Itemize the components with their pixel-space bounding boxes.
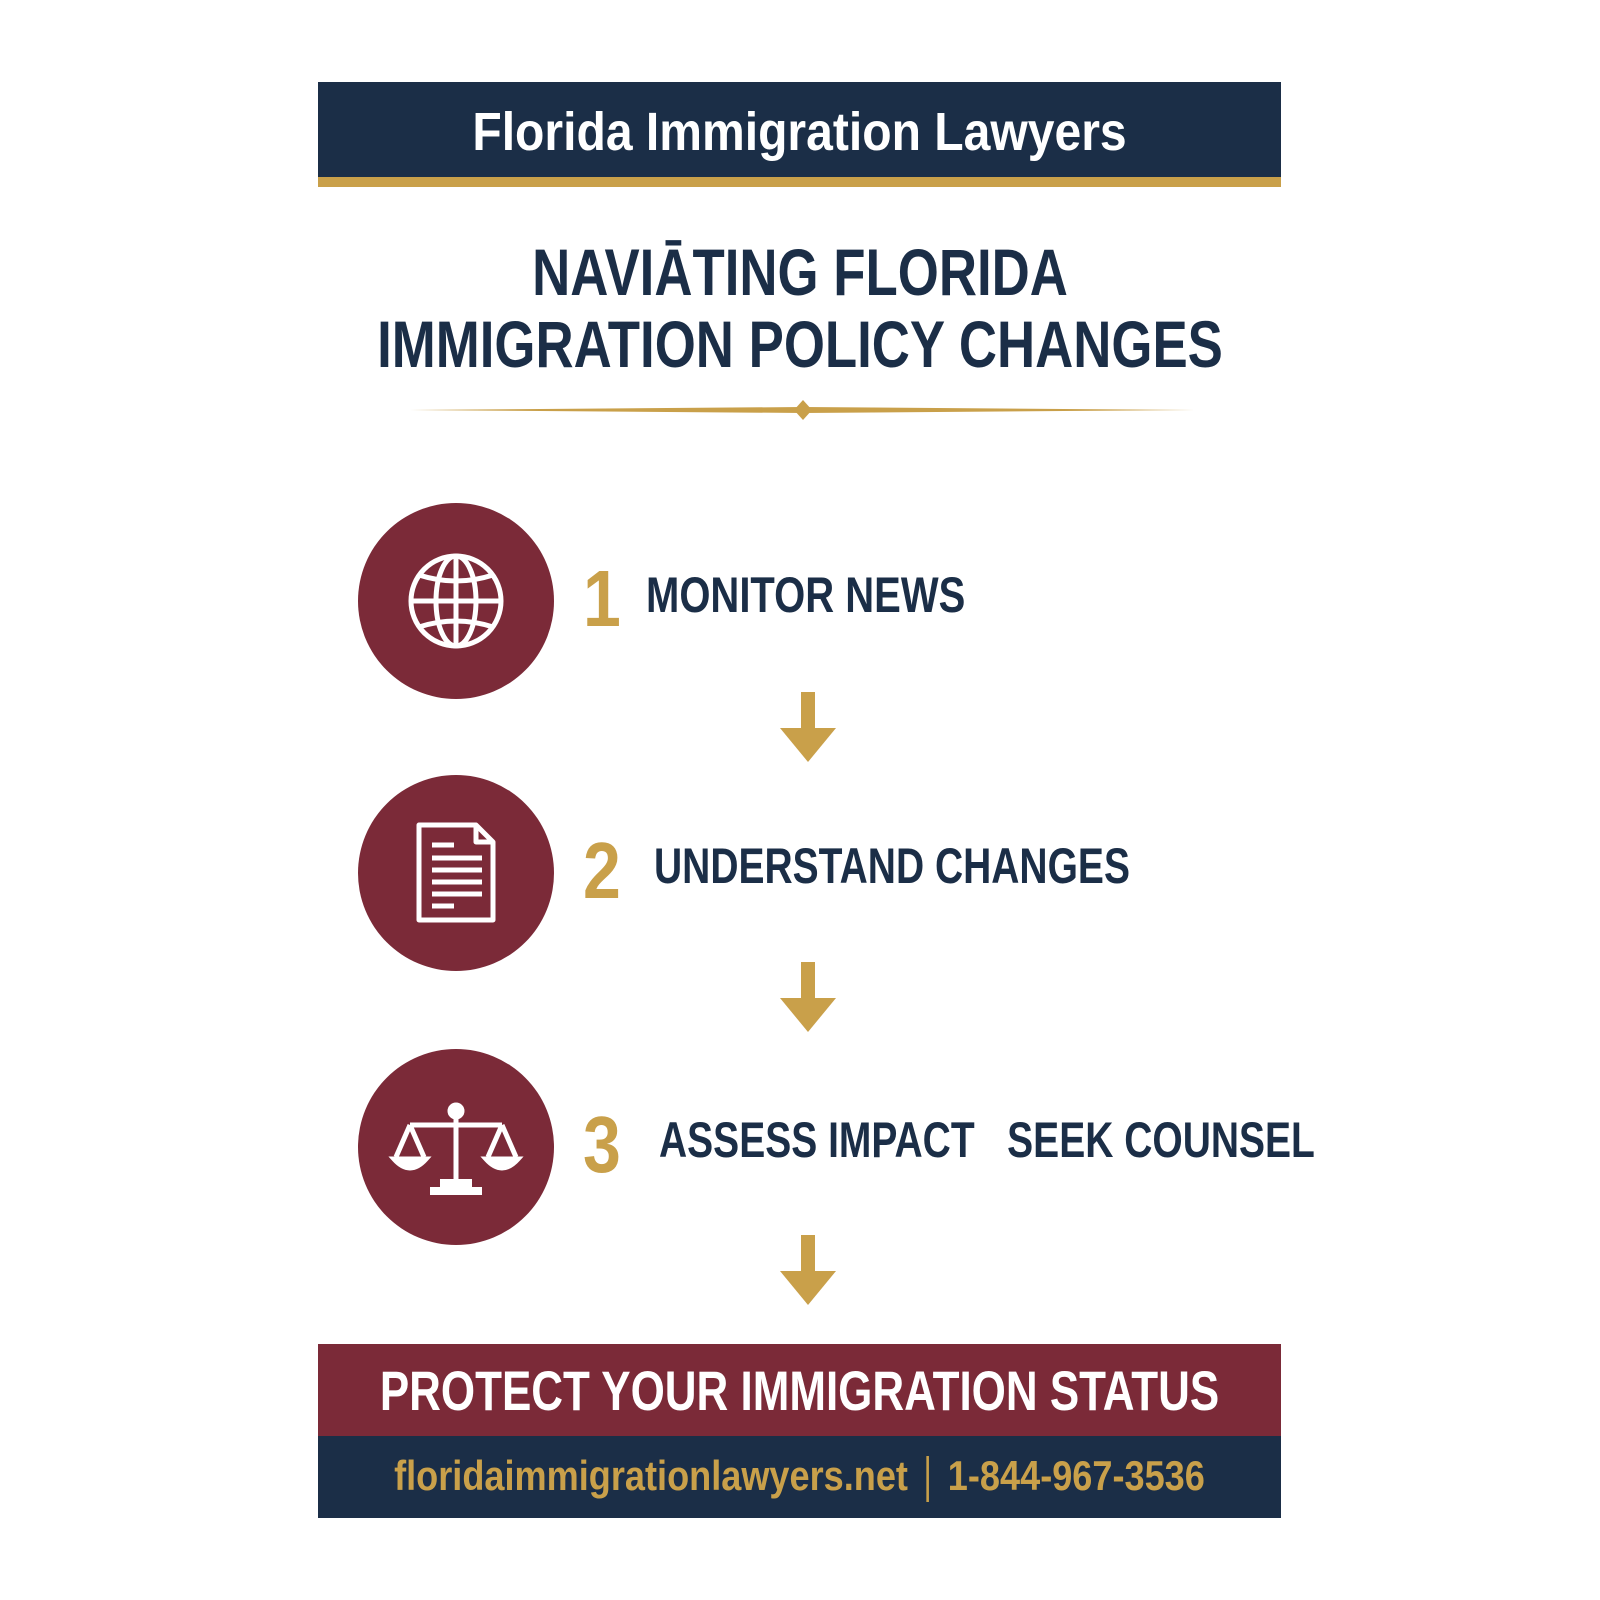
label: monitor news: MONITOR NEWS [646, 567, 965, 623]
number 3: 3 [583, 1100, 621, 1189]
number 1: 1 [583, 554, 621, 643]
contact line: floridaimmigrationlawyers.net 1-844-967-3536 [394, 1452, 1205, 1499]
number 2: 2 [583, 826, 621, 915]
label: understand changes: UNDERSTAND CHANGES [654, 838, 1130, 894]
label: assess impact seek counsel: ASSESS IMPACT SEEK COUNSEL [659, 1112, 1315, 1168]
footer headline: PROTECT YOUR IMMIGRATION STATUS [380, 1359, 1219, 1422]
step 3 [358, 1049, 1315, 1245]
arrow 1 [780, 692, 836, 762]
main title [377, 235, 1223, 381]
icon: globe [358, 503, 554, 699]
arrow 3 [780, 1235, 836, 1305]
icon: document [358, 775, 554, 971]
step 1 [358, 503, 965, 699]
header banner [318, 82, 1281, 187]
arrow 2 [780, 962, 836, 1032]
divider ornament [413, 400, 1192, 420]
header title: Florida Immigration Lawyers [472, 102, 1127, 162]
main title: NAVIĀTING FLORIDA [532, 235, 1068, 309]
main title: IMMIGRATION POLICY CHANGES [377, 307, 1223, 381]
icon: scales of justice [358, 1049, 554, 1245]
step 2 [358, 775, 1130, 971]
footer banner [318, 1344, 1281, 1518]
